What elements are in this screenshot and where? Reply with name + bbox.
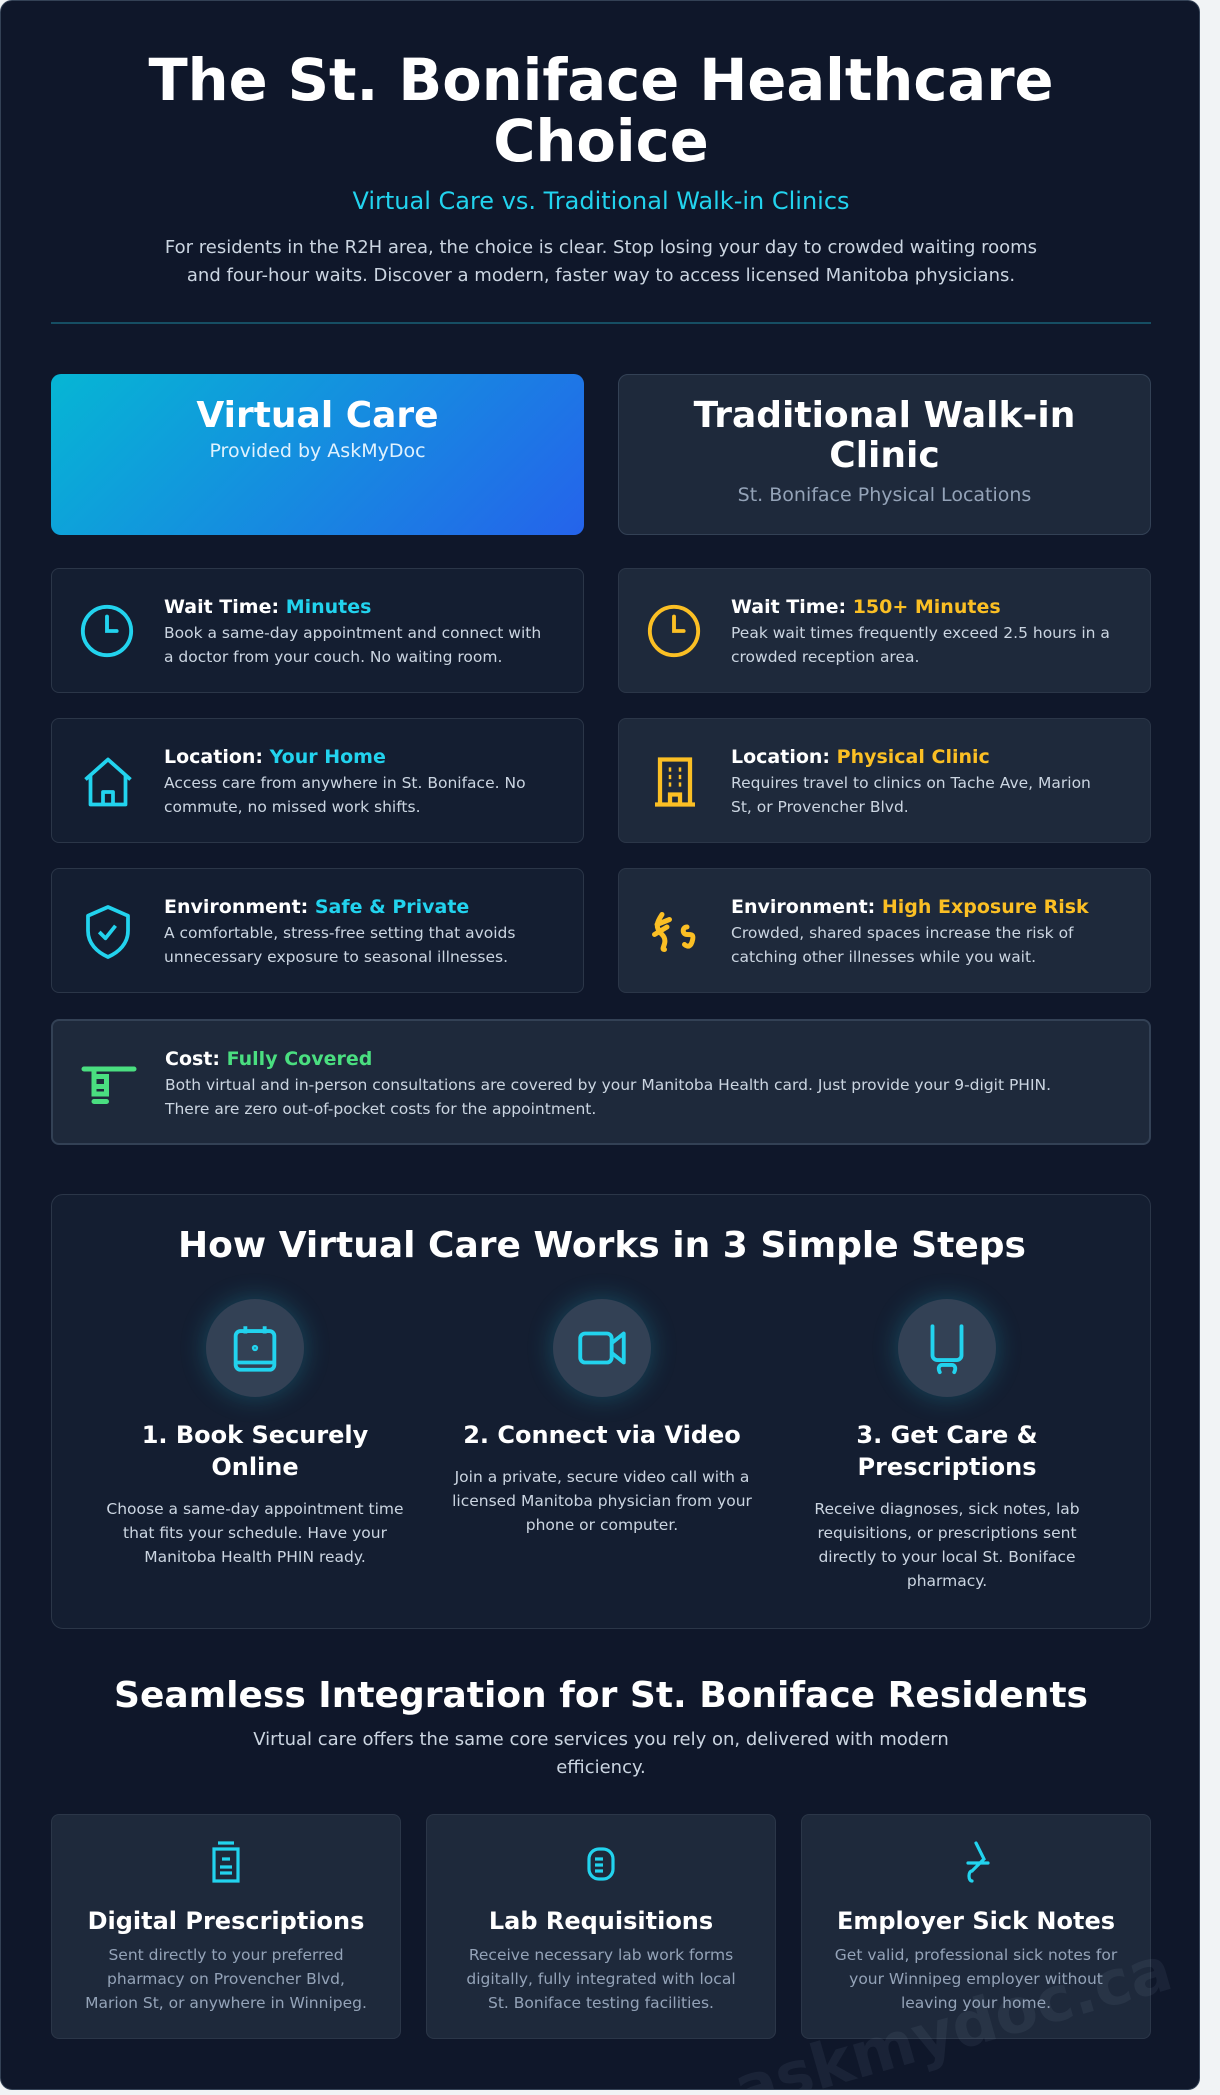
card: clinic wait time [618,568,1151,693]
card: clinic environment: Environment: High Exposure Risk [731,896,1089,918]
icon: house [84,758,132,806]
icon: calendar [206,1299,304,1397]
service: lab requisitions: Lab Requisitions [489,1907,713,1935]
header: virtual care: Provided by AskMyDoc [209,440,426,462]
service: lab requisitions [426,1814,776,2039]
card: clinic wait time: Peak wait times frequently exceed 2.5 hours in a crowded reception area. [731,624,1110,666]
step 2: Join a private, secure video call with a licensed Manitoba physician from your phone or computer. [452,1468,752,1534]
title: Choice [493,108,709,175]
header: traditional clinic: Traditional Walk-in [694,395,1075,436]
header: virtual care [51,374,584,535]
card: clinic location: Requires travel to clinics on Tache Ave, Marion St, or Provencher Blvd. [731,774,1091,816]
card: virtual environment: Environment: Safe & Private [164,896,469,918]
card: clinic environment: Crowded, shared spaces increase the risk of catching other illnesses while you wait. [731,924,1074,966]
service: lab requisitions: St. Boniface testing facilities. [488,1994,714,2012]
step 1: 1. Book Securely [142,1421,368,1449]
card: virtual environment [51,868,584,993]
step 2: 2. Connect via Video [463,1421,741,1449]
icon: cost green [82,1066,136,1104]
intro text: For residents in the R2H area, the choice is clear. Stop losing your day to crowded waiting rooms and four-hour waits. Discover a modern, faster way to access licensed Manitoba physicians. [165,237,1037,286]
card: virtual wait time: Book a same-day appointment and connect with a doctor from your couch. No waiting room. [164,624,541,666]
service: sick notes: Get valid, professional sick notes for your Winnipeg employer without [835,1946,1117,1988]
icon: prescription [898,1299,996,1397]
steps heading: How Virtual Care Works in 3 Simple Steps [178,1225,1026,1266]
section subtitle: Virtual care offers the same core services you rely on, delivered with modern efficiency. [253,1729,949,1778]
card: virtual location: Location: Your Home [164,746,386,768]
icon: building [655,757,695,807]
title [148,47,1054,175]
step 3 [814,1290,1080,1590]
service: digital prescriptions [51,1814,401,2039]
title: The St. Boniface Healthcare [148,47,1054,114]
icon: germs [652,912,696,952]
card: cost: Both virtual and in-person consultations are covered by your Manitoba Health card. Just provide your 9-digit PHIN. There are zero out-of-pocket costs for the appointment. [165,1076,1051,1118]
card: virtual wait time: Wait Time: Minutes [164,596,371,618]
section heading: integration: Seamless Integration for St. Boniface Residents [114,1675,1088,1716]
icon: pen [966,1841,990,1883]
step 1 [106,1290,404,1566]
service: digital prescriptions: Marion St, or anywhere in Winnipeg. [85,1994,367,2012]
header: traditional clinic: St. Boniface Physical Locations [738,484,1031,506]
header: traditional clinic: Clinic [829,435,940,476]
service: lab requisitions: Receive necessary lab work forms digitally, fully integrated with local [466,1946,736,1988]
header: virtual care: Virtual Care [196,395,439,436]
step 1: Online [211,1453,299,1481]
step 3: Receive diagnoses, sick notes, lab requisitions, or prescriptions sent directly to your local St. Boniface pharmacy. [814,1500,1080,1590]
icon: shield [86,905,130,959]
card: virtual location: Access care from anywhere in St. Boniface. No commute, no missed work shifts. [164,774,526,816]
card: virtual wait time [51,568,584,693]
icon: clock amber [648,604,700,658]
card: clinic location [618,718,1151,843]
icon: clock cyan [80,604,134,658]
service: sick notes: Employer Sick Notes [837,1907,1115,1935]
icon: pill bottle [212,1841,240,1883]
card: virtual environment: A comfortable, stress-free setting that avoids unnecessary exposure to seasonal illnesses. [164,924,515,966]
step 3: 3. Get Care & [856,1421,1038,1449]
card: cost: Cost: Fully Covered [165,1048,372,1070]
icon: lab [587,1847,615,1881]
subtitle: Virtual Care vs. Traditional Walk-in Clinics [352,187,850,215]
service: sick notes [801,1814,1151,2039]
card: clinic environment [618,868,1151,993]
card: cost [51,1019,1151,1145]
step 1: Choose a same-day appointment time that fits your schedule. Have your Manitoba Health PHIN ready. [106,1500,404,1566]
icon: video [553,1299,651,1397]
panel: how it works [51,1194,1151,1629]
card: virtual location [51,718,584,843]
header: traditional clinic [618,374,1151,535]
step 2 [452,1290,752,1534]
step 3: Prescriptions [857,1453,1036,1481]
card: clinic location: Location: Physical Clinic [731,746,990,768]
service: digital prescriptions: Sent directly to your preferred pharmacy on Provencher Blvd, [107,1946,345,1988]
service: sick notes: leaving your home. [901,1994,1051,2012]
service: digital prescriptions: Digital Prescriptions [88,1907,364,1935]
card: clinic wait time: Wait Time: 150+ Minutes [731,596,1001,618]
